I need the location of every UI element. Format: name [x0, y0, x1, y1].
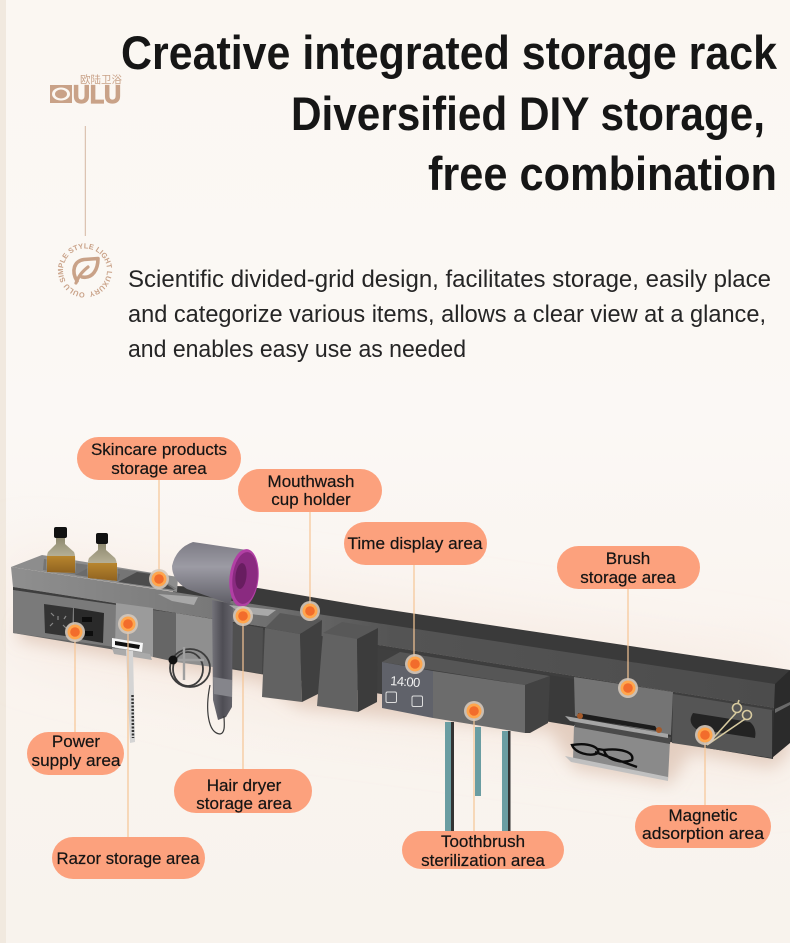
callout: hair dryer storage area: storage area	[196, 794, 292, 813]
brush holder	[565, 677, 673, 781]
hair dryer	[158, 542, 261, 734]
callout: toothbrush sterilization area	[402, 701, 564, 870]
callout: power supply area: Power	[52, 732, 100, 751]
description text: and enables easy use as needed	[128, 336, 466, 363]
description text: and categorize various items, allows a clear view at a glance,	[128, 301, 766, 328]
brand logo: 欧陆卫浴	[80, 72, 122, 87]
dryer holder arm	[229, 605, 276, 616]
callout: power supply area: supply area	[32, 751, 121, 770]
callout: brush storage area: Brush	[606, 549, 650, 568]
wall shadow under rack	[18, 620, 790, 785]
callout: skincare products storage area: Skincare products	[91, 440, 227, 459]
sterilizer box with clock: 14:00	[390, 673, 421, 690]
callout: magnetic adsorption area: Magnetic	[669, 806, 738, 825]
callout: mouthwash cup holder: Mouthwash	[268, 472, 354, 491]
middle panels	[153, 610, 263, 674]
callout: magnetic adsorption area: adsorption area	[642, 824, 765, 843]
power sockets	[44, 604, 104, 643]
description text: Scientific divided-grid design, facilitates storage, easily place	[128, 266, 771, 293]
rack lower body	[13, 587, 775, 759]
callout: power supply area	[27, 622, 124, 775]
callout: razor storage area: Razor storage area	[56, 849, 200, 868]
callout: toothbrush sterilization area: Toothbrush	[441, 832, 525, 851]
icon: leaf	[74, 258, 98, 283]
callout: mouthwash cup holder: cup holder	[271, 490, 351, 509]
magnetic panel	[672, 670, 790, 758]
rack front band	[11, 567, 775, 708]
wall glow around rack	[10, 550, 790, 780]
callout: time display area: Time display area	[348, 534, 483, 553]
brand logo	[50, 72, 122, 109]
callout: razor storage area	[52, 614, 205, 879]
sterilizer box with clock	[382, 652, 550, 733]
callout: skincare products storage area: storage area	[111, 459, 207, 478]
band lower groove	[13, 587, 775, 711]
callout: time display area	[344, 522, 487, 674]
skincare tray	[11, 555, 178, 592]
mouthwash cups	[262, 613, 378, 712]
callout: toothbrush sterilization area: sterilization area	[421, 851, 545, 870]
razor panel	[115, 603, 153, 657]
icon: scissors	[707, 700, 752, 745]
bottles	[47, 527, 117, 581]
toothbrushes	[445, 722, 510, 835]
callout: mouthwash cup holder	[238, 469, 382, 621]
decorative vertical connector	[84, 126, 86, 236]
description text	[128, 266, 771, 363]
rack top surface	[173, 586, 790, 694]
title	[121, 26, 778, 200]
cable hook and cord	[168, 647, 210, 687]
callout: magnetic adsorption area	[635, 725, 771, 848]
callout: skincare products storage area	[77, 437, 241, 589]
round badge with leaf icon: OULU SIMPLE STYLE LIGHT LUXURY	[58, 243, 112, 298]
storage rack product illustration	[11, 527, 790, 835]
left wall panel	[13, 590, 117, 647]
razor	[112, 638, 152, 743]
callout: brush storage area: storage area	[580, 568, 676, 587]
callout: brush storage area	[557, 546, 700, 698]
brand logo: ULU	[73, 81, 121, 109]
callout: hair dryer storage area: Hair dryer	[207, 776, 282, 795]
callout: hair dryer storage area	[174, 606, 312, 813]
